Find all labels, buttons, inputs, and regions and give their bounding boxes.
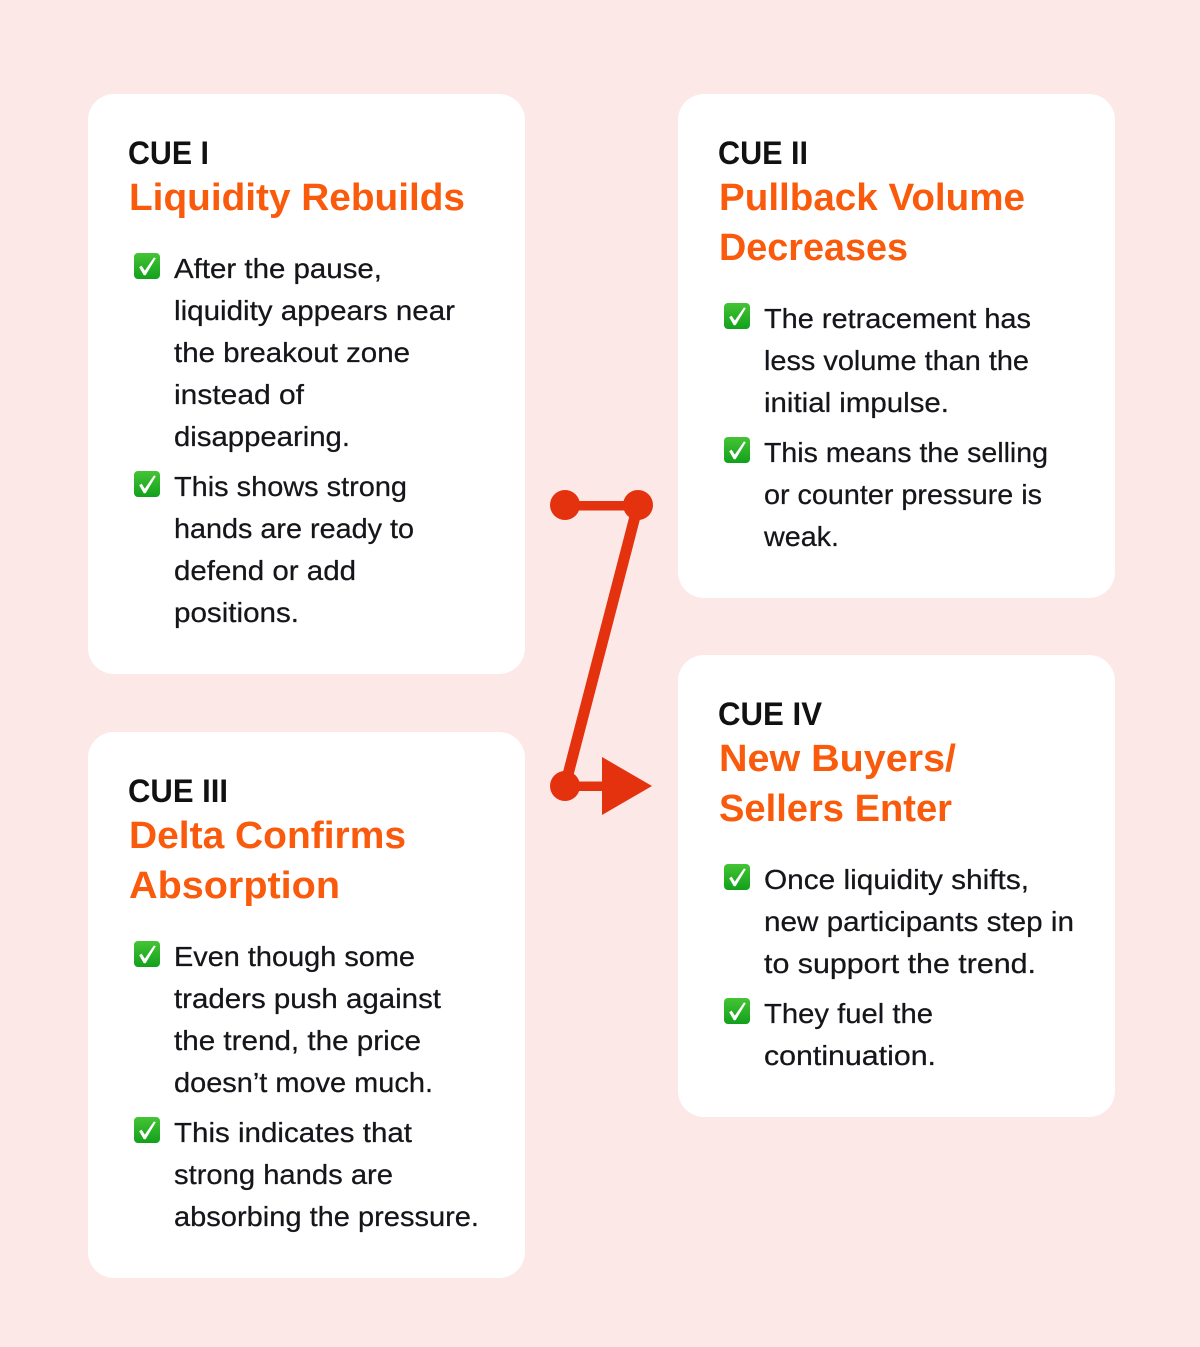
heading: Cue II: Decreases bbox=[719, 227, 908, 269]
heading: Cue IV: Sellers Enter bbox=[719, 788, 952, 830]
checklist item: liquidity appears: instead of bbox=[174, 379, 304, 410]
checklist item: less volume: less volume than the bbox=[764, 345, 1029, 376]
checklist item: strong hands: hands are ready to bbox=[174, 513, 414, 544]
checklist item: price holds: traders push against bbox=[174, 983, 441, 1014]
heading: Cue II: CUE II bbox=[718, 135, 808, 171]
checklist item: liquidity appears: disappearing. bbox=[174, 421, 350, 452]
checklist item: less volume bbox=[724, 303, 1031, 418]
checklist item: weak pressure: This means the selling bbox=[764, 437, 1048, 468]
checklist item: new participants: new participants step in bbox=[764, 906, 1074, 937]
heading: Cue IV: New Buyers/ bbox=[719, 738, 956, 780]
heading: Cue IV bbox=[718, 696, 956, 830]
checklist item: price holds: doesn’t move much. bbox=[174, 1067, 433, 1098]
heading: Cue III bbox=[128, 773, 406, 907]
checklist item: strong hands: defend or add bbox=[174, 555, 356, 586]
checklist item: weak pressure: or counter pressure is bbox=[764, 479, 1042, 510]
heading: Cue I bbox=[128, 135, 465, 219]
checklist item: less volume: The retracement has bbox=[764, 303, 1031, 334]
checklist item: liquidity appears: liquidity appears near bbox=[174, 295, 455, 326]
arrow: connector from Cue I through Cue II and Cue III to Cue IV bbox=[550, 490, 653, 815]
heading: Cue IV: CUE IV bbox=[718, 696, 823, 732]
panel: Cue II bbox=[678, 94, 1115, 598]
checklist item: weak pressure bbox=[724, 437, 1048, 552]
heading: Cue II: Pullback Volume bbox=[719, 177, 1025, 219]
checklist item: strong hands bbox=[134, 471, 414, 628]
checklist item: strong hands: positions. bbox=[174, 597, 299, 628]
checklist item: price holds: Even though some bbox=[174, 941, 415, 972]
checklist item: fuel continuation: continuation. bbox=[764, 1040, 936, 1071]
panel: Cue I bbox=[88, 94, 525, 674]
checklist item: price holds bbox=[134, 941, 441, 1098]
checklist item: strong hands: This shows strong bbox=[174, 471, 407, 502]
checklist item: absorbing pressure: absorbing the pressure. bbox=[174, 1201, 479, 1232]
checklist item: new participants: Once liquidity shifts, bbox=[764, 864, 1029, 895]
panel: Cue IV bbox=[678, 655, 1115, 1117]
checklist item: weak pressure: weak. bbox=[763, 521, 839, 552]
checklist item: less volume: initial impulse. bbox=[764, 387, 949, 418]
checklist item: new participants: to support the trend. bbox=[764, 948, 1036, 979]
heading: Cue III: Absorption bbox=[129, 865, 340, 907]
heading: Cue I: Liquidity Rebuilds bbox=[129, 177, 465, 219]
checklist item: new participants bbox=[724, 864, 1074, 979]
checklist item: liquidity appears: After the pause, bbox=[174, 253, 382, 284]
checklist item: fuel continuation bbox=[724, 998, 936, 1071]
heading: Cue III: CUE III bbox=[128, 773, 228, 809]
heading: Cue I: CUE I bbox=[128, 135, 209, 171]
checklist item: liquidity appears bbox=[134, 253, 455, 452]
checklist item: price holds: the trend, the price bbox=[174, 1025, 421, 1056]
heading: Cue III: Delta Confirms bbox=[129, 815, 406, 857]
checklist item: fuel continuation: They fuel the bbox=[764, 998, 933, 1029]
panel: Cue III bbox=[88, 732, 525, 1278]
checklist item: absorbing pressure: This indicates that bbox=[174, 1117, 412, 1148]
heading: Cue II bbox=[718, 135, 1025, 269]
checklist item: absorbing pressure: strong hands are bbox=[174, 1159, 393, 1190]
checklist item: absorbing pressure bbox=[134, 1117, 479, 1232]
checklist item: liquidity appears: the breakout zone bbox=[174, 337, 410, 368]
